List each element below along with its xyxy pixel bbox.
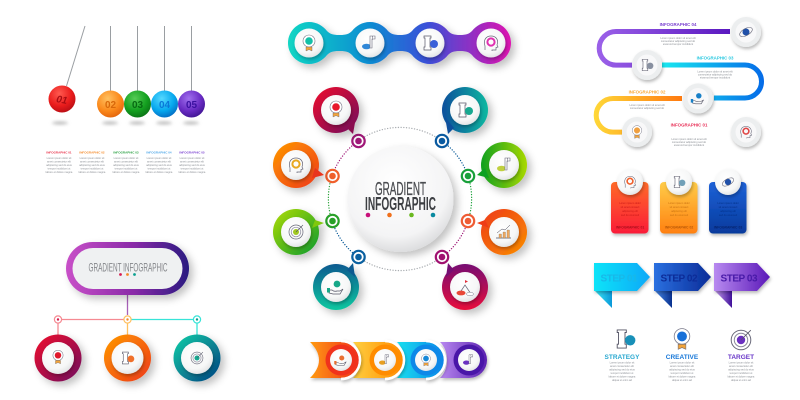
captions: Lorem ipsum dolor sit [80, 156, 105, 160]
captions: adipiscing sed do eius [46, 163, 72, 167]
card red: sit amet consect [621, 205, 640, 209]
captions: amet consectetur elit [180, 160, 204, 164]
column: target: adipiscing sed do eius [728, 368, 754, 372]
card blue: sit amet consect [719, 205, 738, 209]
dotted ring [328, 127, 472, 271]
central circle title: GRADIENT [375, 179, 426, 199]
card red [611, 169, 648, 234]
step 03 [714, 263, 770, 308]
chain icon 2 [356, 28, 384, 58]
card orange: sed do eiusmod [670, 213, 689, 217]
path descriptions: consectetur adipiscing sed do [630, 106, 665, 110]
column: target: aliqua ut enim ad [731, 378, 751, 382]
column: creative: Lorem ipsum dolor sit [670, 360, 695, 364]
captions: tempor incididunt ut [115, 166, 138, 170]
captions: Lorem ipsum dolor sit [47, 156, 72, 160]
path labels: INFOGRAPHIC 02 [629, 90, 666, 94]
card orange: adipiscing elit [671, 209, 687, 213]
ball 02 [97, 90, 124, 118]
card orange [660, 169, 698, 234]
column: creative: adipiscing sed do eius [669, 368, 695, 372]
captions: tempor incididunt ut [181, 166, 204, 170]
path node 03 [632, 50, 662, 80]
segment 1 orange [310, 341, 360, 379]
panel: newton's cradle [46, 26, 206, 174]
bubble: bottom-right [442, 263, 488, 310]
column: target: labore et dolore magna [728, 374, 755, 378]
bubble: upper-left [273, 142, 324, 188]
card blue [709, 169, 746, 234]
card orange: INFOGRAPHIC 02 [665, 226, 693, 230]
captions: INFOGRAPHIC 01 [46, 150, 72, 154]
path descriptions: eiusmod tempor incididunt [674, 143, 704, 147]
column: target: tempor incididunt ut [730, 371, 753, 375]
path node 01 [622, 117, 652, 147]
path descriptions: Lorem ipsum dolor sit amet elit [697, 70, 733, 74]
captions: amet consectetur elit [114, 160, 138, 164]
segment 3 blue [397, 341, 445, 379]
step 02 [654, 263, 711, 308]
captions: Lorem ipsum dolor sit [114, 156, 139, 160]
circle: red badge [34, 334, 82, 382]
bubble: bottom-left [313, 263, 359, 310]
path node 04 [731, 17, 761, 47]
panel: step arrows [594, 263, 770, 382]
strings [66, 26, 192, 91]
heading pill [66, 242, 189, 295]
panel: winding path timeline [596, 17, 762, 147]
column: creative [666, 354, 699, 382]
captions: tempor incididunt ut [48, 166, 71, 170]
captions: INFOGRAPHIC 02 [79, 150, 105, 154]
path node 02 [683, 84, 713, 114]
card blue: sed do eiusmod [719, 213, 738, 217]
path descriptions: Lorem ipsum dolor sit amet elit [629, 103, 665, 107]
ball 04 [151, 90, 178, 118]
captions: INFOGRAPHIC 05 [179, 150, 205, 154]
chain icon 3 [416, 28, 444, 58]
floor shadows [52, 122, 199, 124]
central circle title [348, 146, 454, 252]
panel: central radial diagram [273, 87, 527, 310]
column: target [728, 354, 755, 382]
path descriptions: consectetur adipiscing sed do [672, 140, 707, 144]
captions: labore et dolore magna [46, 170, 73, 174]
column: strategy: labore et dolore magna [609, 374, 636, 378]
ball 01: 01 [55, 94, 69, 107]
panel: top chain [288, 22, 511, 64]
captions: adipiscing sed do eius [179, 163, 205, 167]
column: strategy: tempor incididunt ut [611, 371, 634, 375]
bubble: lower-left [273, 209, 324, 255]
bubble: lower-right [477, 209, 527, 255]
path node 00 [731, 117, 761, 147]
path descriptions: eiusmod tempor incididunt [663, 42, 693, 46]
chain icon 1 [294, 28, 324, 58]
column: strategy: Lorem ipsum dolor sit [610, 360, 635, 364]
captions: adipiscing sed do eius [79, 163, 105, 167]
path labels: INFOGRAPHIC 03 [697, 56, 734, 60]
card orange: Lorem ipsum dolor [668, 201, 690, 205]
captions: amet consectetur elit [147, 160, 171, 164]
card blue: INFOGRAPHIC 03 [714, 226, 742, 230]
ball 05: 05 [186, 100, 197, 111]
path segment red [653, 130, 730, 134]
captions: adipiscing sed do eius [113, 163, 139, 167]
panel: hierarchy tree [34, 242, 220, 382]
step 02: STEP 02 [660, 274, 698, 284]
bubble: top-left [313, 87, 359, 134]
path segment orange [596, 98, 682, 132]
captions: Lorem ipsum dolor sit [180, 156, 205, 160]
column: target: amet consectetur elit [729, 364, 753, 368]
path descriptions: Lorem ipsum dolor sit amet elit [660, 36, 696, 40]
captions: INFOGRAPHIC 04 [146, 150, 172, 154]
column: creative: amet consectetur elit [670, 364, 694, 368]
column: creative: CREATIVE [666, 354, 699, 361]
captions: tempor incididunt ut [81, 166, 104, 170]
connector nodes [54, 316, 201, 323]
path descriptions: eiusmod tempor incididunt [700, 76, 730, 80]
column: strategy: adipiscing sed do eius [609, 368, 635, 372]
column: strategy: amet consectetur elit [610, 364, 634, 368]
ring node centres [329, 138, 471, 260]
captions: tempor incididunt ut [148, 166, 171, 170]
ball 03: 03 [132, 100, 143, 111]
segment 4 purple [440, 342, 487, 378]
card red: Lorem ipsum dolor [619, 201, 641, 205]
central circle title: INFOGRAPHIC [365, 194, 436, 214]
path labels: INFOGRAPHIC 04 [660, 22, 697, 27]
column: creative: labore et dolore magna [669, 374, 696, 378]
column: strategy [605, 354, 640, 382]
path descriptions: consectetur adipiscing sed do [698, 72, 733, 76]
step 01 [594, 263, 650, 308]
column: target: Lorem ipsum dolor sit [729, 360, 754, 364]
card orange: sit amet consect [670, 205, 689, 209]
step 01: STEP 01 [600, 274, 638, 284]
path descriptions: consectetur adipiscing sed do [661, 39, 696, 43]
column: creative: aliqua ut enim ad [672, 378, 692, 382]
icon: creative [674, 329, 690, 349]
card blue: adipiscing elit [720, 209, 736, 213]
captions: amet consectetur elit [80, 160, 104, 164]
panel: bottom arrow strip [310, 341, 487, 379]
ball 03 [124, 90, 151, 118]
captions: labore et dolore magna [79, 170, 106, 174]
icon: target [731, 330, 751, 350]
card blue: Lorem ipsum dolor [717, 201, 739, 205]
card red: adipiscing elit [622, 209, 638, 213]
segment 2 yellow [353, 341, 404, 379]
column: strategy: STRATEGY [605, 354, 640, 361]
path labels: INFOGRAPHIC 01 [671, 122, 708, 128]
icon: strategy [617, 330, 635, 348]
path segment cyan [662, 65, 762, 98]
panel: cards [611, 169, 746, 234]
circle: orange badge [104, 334, 151, 382]
ball 05 [178, 90, 205, 118]
path labels [629, 22, 734, 128]
column: target: TARGET [728, 354, 754, 361]
heading pill: GRADIENT INFOGRAPHIC [88, 260, 168, 274]
captions [46, 150, 206, 174]
ball 02: 02 [105, 100, 116, 111]
captions: labore et dolore magna [179, 170, 206, 174]
ball 01 [48, 86, 76, 112]
card red: INFOGRAPHIC 01 [616, 226, 644, 230]
path descriptions: Lorem ipsum dolor sit amet elit [671, 137, 707, 141]
circle: teal badge [174, 334, 220, 382]
ball 04: 04 [159, 100, 170, 111]
captions: amet consectetur elit [47, 160, 71, 164]
connector lines [58, 295, 197, 336]
chain band [288, 22, 511, 64]
chain icon 4 [476, 28, 506, 58]
bubble: upper-right [477, 142, 527, 188]
bubble: top-right [442, 87, 488, 134]
path segment purple [599, 32, 730, 65]
captions: INFOGRAPHIC 03 [113, 150, 139, 154]
captions: Lorem ipsum dolor sit [147, 156, 172, 160]
column: creative: tempor incididunt ut [671, 371, 694, 375]
path descriptions [629, 36, 733, 147]
card red: sed do eiusmod [621, 213, 640, 217]
captions: labore et dolore magna [113, 170, 140, 174]
captions: adipiscing sed do eius [146, 163, 172, 167]
captions: labore et dolore magna [146, 170, 173, 174]
ring nodes [326, 135, 474, 263]
step 03: STEP 03 [720, 274, 758, 284]
column: strategy: aliqua ut enim ad [612, 378, 632, 382]
